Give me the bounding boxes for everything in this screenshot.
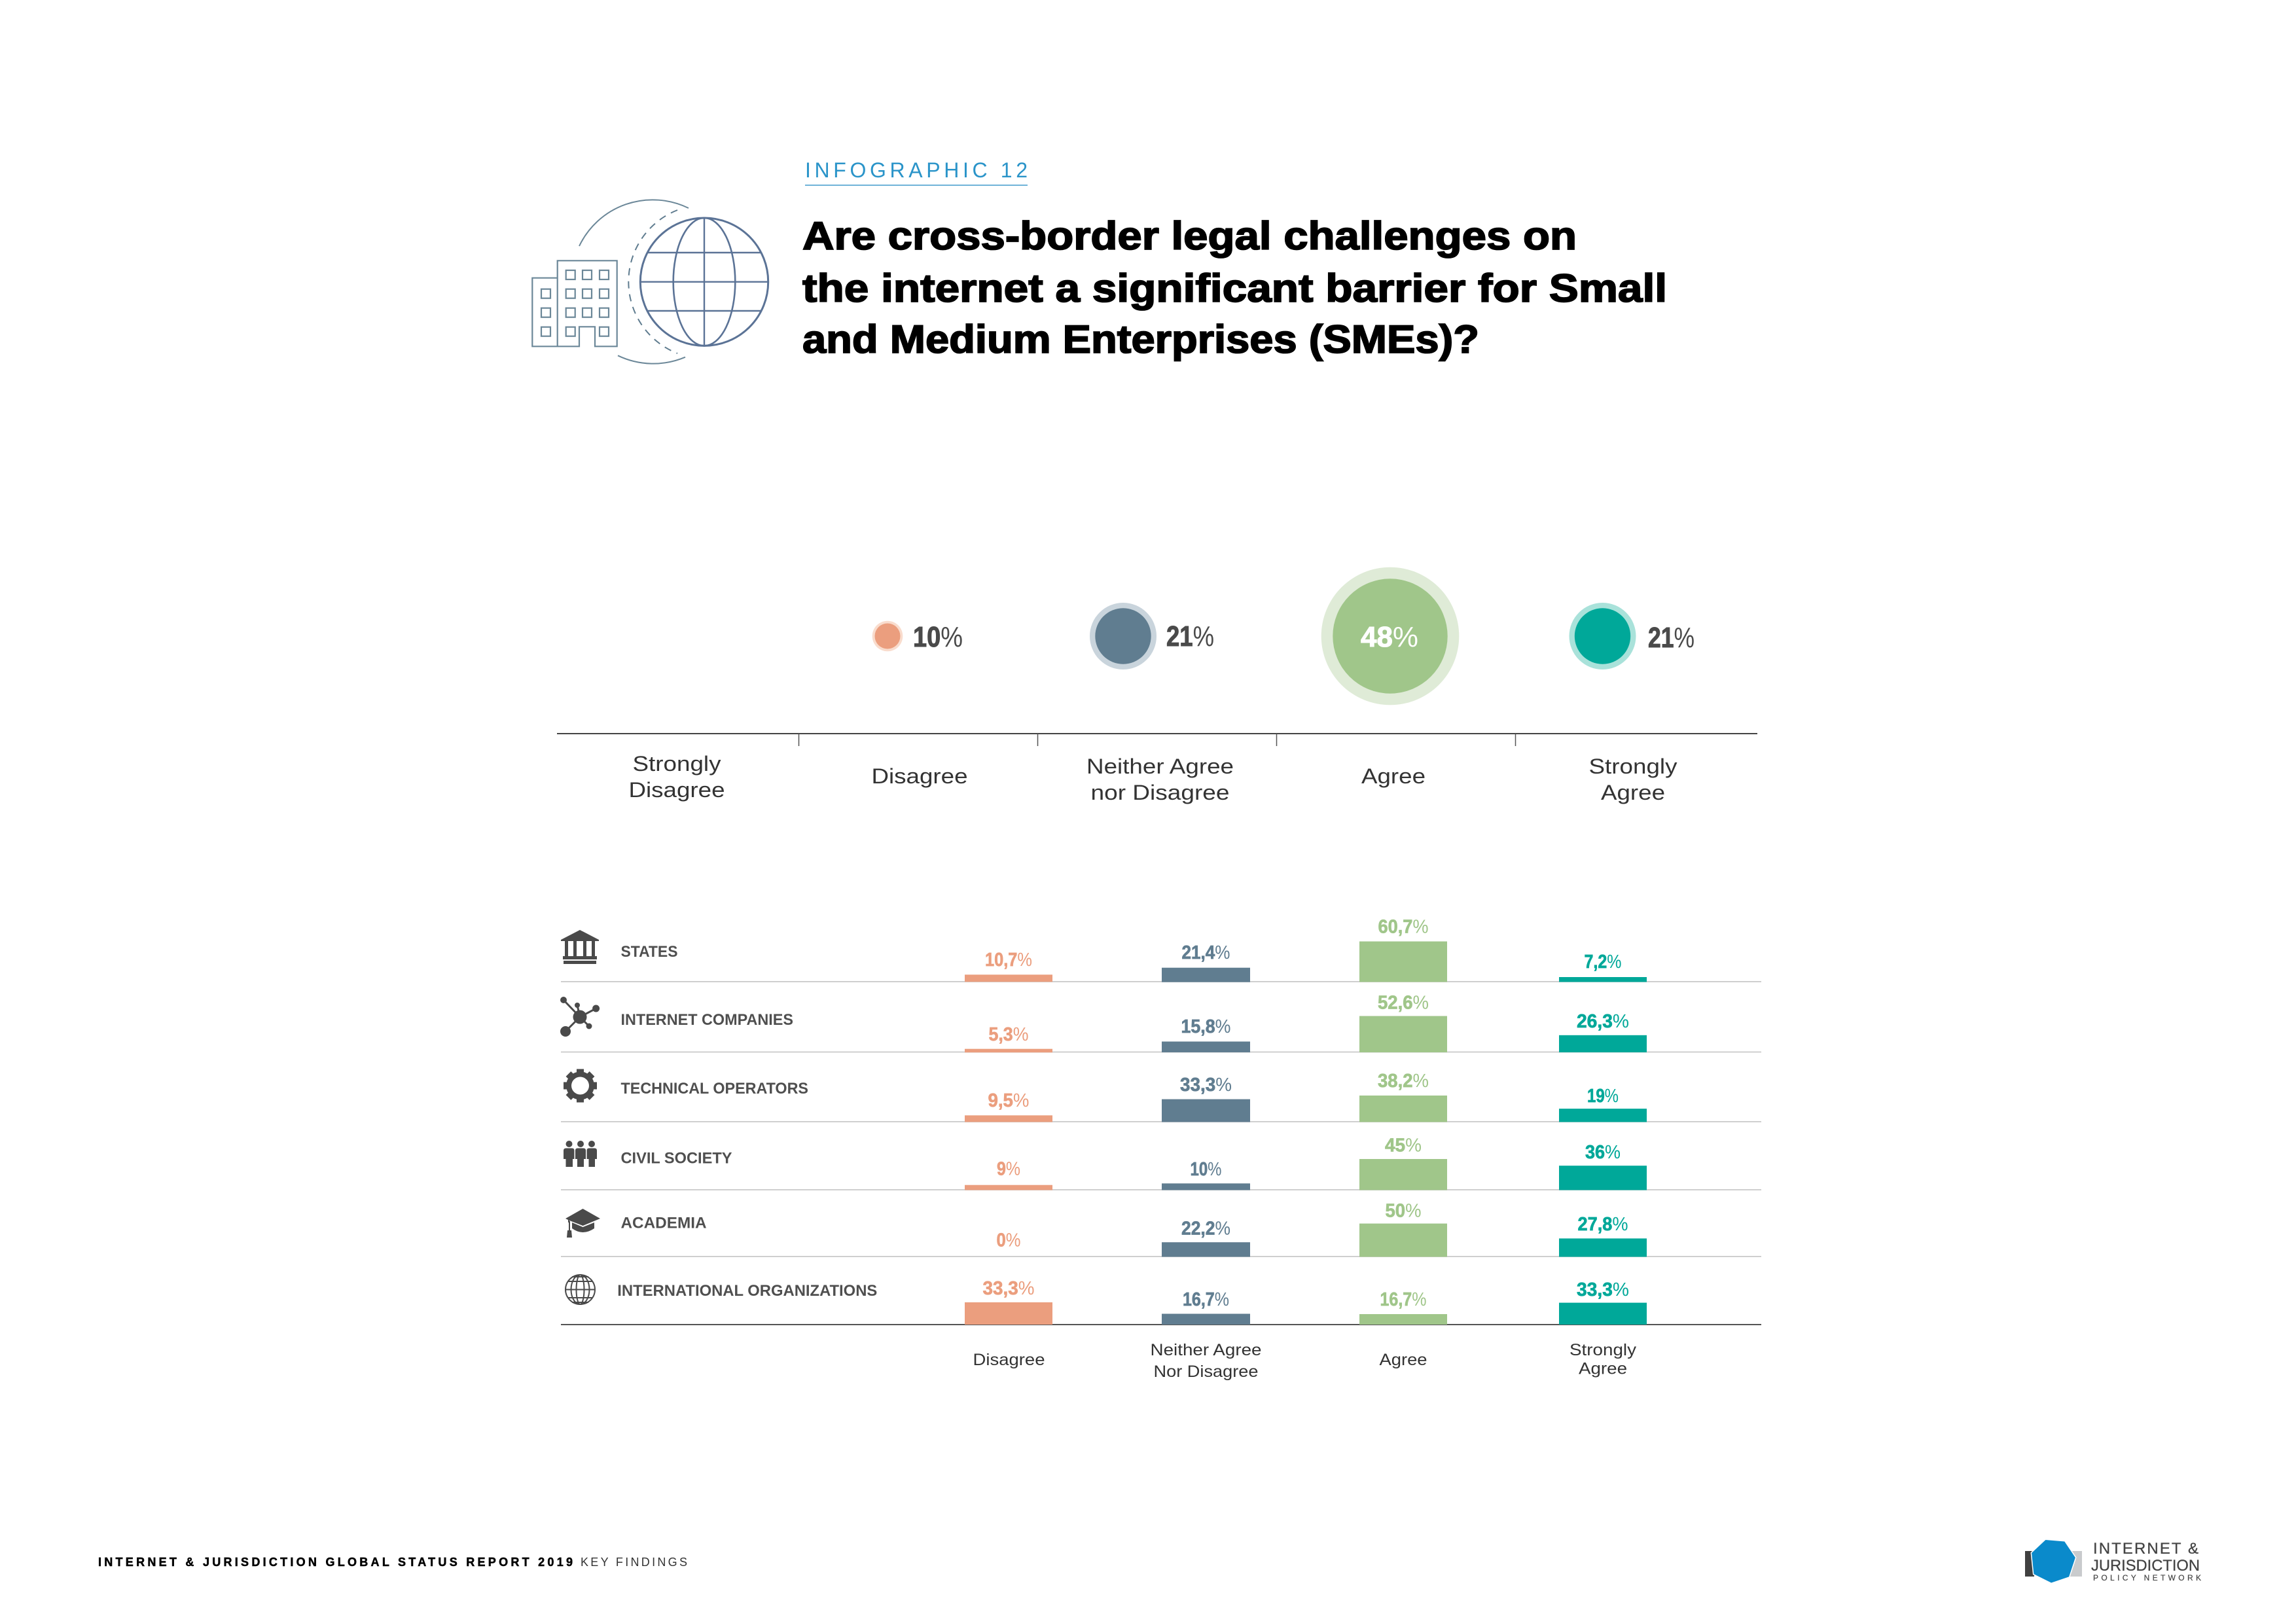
- logo: internet and jurisdiction policy network: JURISDICTION: [2091, 1557, 2200, 1575]
- likert scale labels: nor Disagree: [1090, 781, 1229, 804]
- logo: internet and jurisdiction policy network: [2025, 1539, 2201, 1583]
- icon: network nodes: [560, 997, 600, 1037]
- bubble: strongly agree 21%: [1570, 603, 1695, 669]
- values: academia: 27,8%: [1577, 1214, 1628, 1235]
- values: international organizations: 16,7%: [1380, 1289, 1427, 1310]
- values: international organizations: [965, 1278, 1647, 1325]
- row: civil society: [561, 1135, 1761, 1190]
- values: internet companies: 52,6%: [1378, 992, 1429, 1013]
- likert scale labels: [628, 752, 1677, 804]
- icon: graduation cap: [565, 1209, 600, 1238]
- values: civil society: 36%: [1585, 1142, 1621, 1163]
- row: states: [561, 917, 1761, 982]
- eyebrow: infographic number: INFOGRAPHIC 12: [805, 158, 1028, 182]
- values: international organizations: 33,3%: [983, 1278, 1034, 1299]
- values: states: 10,7%: [985, 950, 1032, 971]
- values: states: 60,7%: [1378, 917, 1428, 938]
- bubble: disagree 10%: [872, 621, 963, 653]
- likert axis: [557, 733, 1757, 746]
- values: internet companies: 26,3%: [1577, 1011, 1629, 1032]
- values: civil society: 9%: [997, 1158, 1020, 1179]
- values: technical operators: 9,5%: [988, 1090, 1029, 1111]
- bar chart column labels: Strongly: [1570, 1341, 1637, 1359]
- bubble: agree 48%: [1321, 567, 1459, 705]
- bar chart column labels: Agree: [1579, 1360, 1627, 1378]
- row: internet companies: [560, 992, 1761, 1052]
- bar chart column labels: Agree: [1380, 1351, 1427, 1369]
- values: technical operators: 38,2%: [1378, 1071, 1429, 1092]
- bubble: disagree 10%: 10%: [913, 621, 963, 653]
- label: internet companies: INTERNET COMPANIES: [620, 1011, 793, 1029]
- bar chart column labels: [973, 1341, 1637, 1381]
- values: civil society: [965, 1135, 1647, 1190]
- bubble: agree 48%: 48%: [1361, 621, 1418, 653]
- row: technical operators: [561, 1069, 1761, 1122]
- values: states: 21,4%: [1182, 942, 1230, 963]
- row: academia: [561, 1200, 1761, 1257]
- title: the internet a significant barrier for Small: [802, 266, 1667, 310]
- bubble: strongly agree 21%: 21%: [1648, 622, 1695, 654]
- values: internet companies: 15,8%: [1181, 1016, 1230, 1037]
- label: academia: ACADEMIA: [620, 1215, 707, 1232]
- icon: buildings and globe: [532, 200, 768, 364]
- row: international organizations: [561, 1275, 1761, 1325]
- likert scale labels: Disagree: [872, 764, 967, 788]
- title: and Medium Enterprises (SMEs)?: [802, 317, 1479, 361]
- values: academia: 22,2%: [1181, 1219, 1230, 1240]
- logo: internet and jurisdiction policy network: INTERNET &: [2093, 1540, 2198, 1558]
- values: international organizations: 33,3%: [1577, 1279, 1629, 1300]
- values: internet companies: 5,3%: [988, 1024, 1029, 1045]
- icon: gear: [564, 1069, 597, 1102]
- logo: internet and jurisdiction policy network: POLICY NETWORK: [2093, 1573, 2201, 1582]
- icon: institution building: [561, 930, 599, 964]
- label: technical operators: TECHNICAL OPERATORS: [620, 1080, 808, 1097]
- likert scale labels: Agree: [1361, 764, 1426, 788]
- likert scale labels: Strongly: [632, 752, 721, 776]
- values: states: [965, 917, 1647, 982]
- likert scale labels: Disagree: [628, 778, 725, 802]
- icon: three people: [564, 1141, 597, 1167]
- bubble: neither 21%: 21%: [1166, 620, 1214, 652]
- bar chart column labels: Nor Disagree: [1153, 1363, 1258, 1381]
- values: states: 7,2%: [1584, 952, 1622, 972]
- label: civil society: CIVIL SOCIETY: [620, 1149, 732, 1168]
- bar chart column labels: Neither Agree: [1151, 1341, 1262, 1359]
- values: academia: [996, 1200, 1647, 1257]
- icon: small globe: [565, 1275, 595, 1304]
- likert scale labels: Neither Agree: [1086, 755, 1234, 778]
- values: civil society: 45%: [1385, 1135, 1422, 1156]
- label: international organizations: INTERNATIONAL ORGANIZATIONS: [617, 1282, 877, 1300]
- values: international organizations: 16,7%: [1183, 1289, 1229, 1310]
- bubble: neither 21%: [1090, 603, 1214, 669]
- values: academia: 50%: [1385, 1200, 1422, 1221]
- values: technical operators: [965, 1071, 1647, 1122]
- values: internet companies: [965, 992, 1647, 1052]
- title: [802, 214, 1667, 361]
- footer: report name: KEY FINDINGS: [581, 1556, 687, 1569]
- label: states: STATES: [620, 943, 678, 961]
- footer: report name: INTERNET & JURISDICTION GLOBAL STATUS REPORT 2019: [98, 1556, 573, 1569]
- likert scale labels: Strongly: [1589, 755, 1677, 778]
- values: academia: 0%: [996, 1230, 1021, 1251]
- title: Are cross-border legal challenges on: [802, 214, 1577, 258]
- values: technical operators: 19%: [1587, 1086, 1619, 1107]
- bar chart column labels: Disagree: [973, 1351, 1045, 1369]
- values: civil society: 10%: [1190, 1159, 1221, 1180]
- likert scale labels: Agree: [1601, 781, 1665, 804]
- values: technical operators: 33,3%: [1180, 1075, 1232, 1096]
